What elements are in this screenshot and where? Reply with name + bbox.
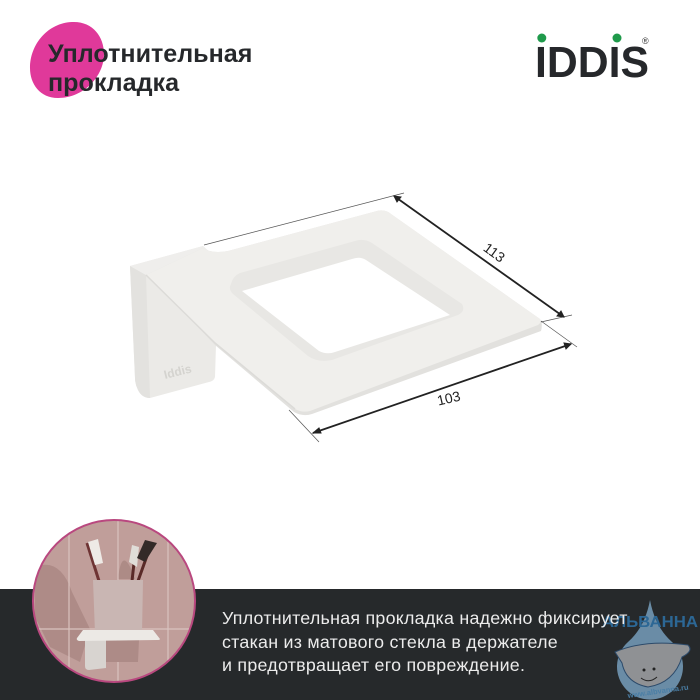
width dimension 113: 113 [481,239,508,266]
dark footer band [0,589,700,700]
body text: и предотвращает его повреждение. [222,655,525,675]
length dimension 103 [289,321,577,442]
body text: Уплотнительная прокладка надежно фиксирует [222,608,628,628]
photo circle [32,519,196,683]
back plate: Iddis [162,361,193,382]
title: Уплотнительная [48,40,252,68]
back plate [130,246,216,398]
brand logo: ® [642,36,649,46]
title [48,40,252,97]
watermark logo: www.albvanna.ru [626,682,689,700]
watermark logo [602,600,698,700]
length dimension 103: 103 [436,388,462,408]
width dimension 113 [204,193,572,322]
watermark logo: АЛЬВАННА [602,614,698,631]
title: прокладка [48,69,179,97]
body text: стакан из матового стекла в держателе [222,632,558,652]
body text [222,608,628,675]
pink blob [30,22,104,98]
shelf plate [146,210,542,415]
